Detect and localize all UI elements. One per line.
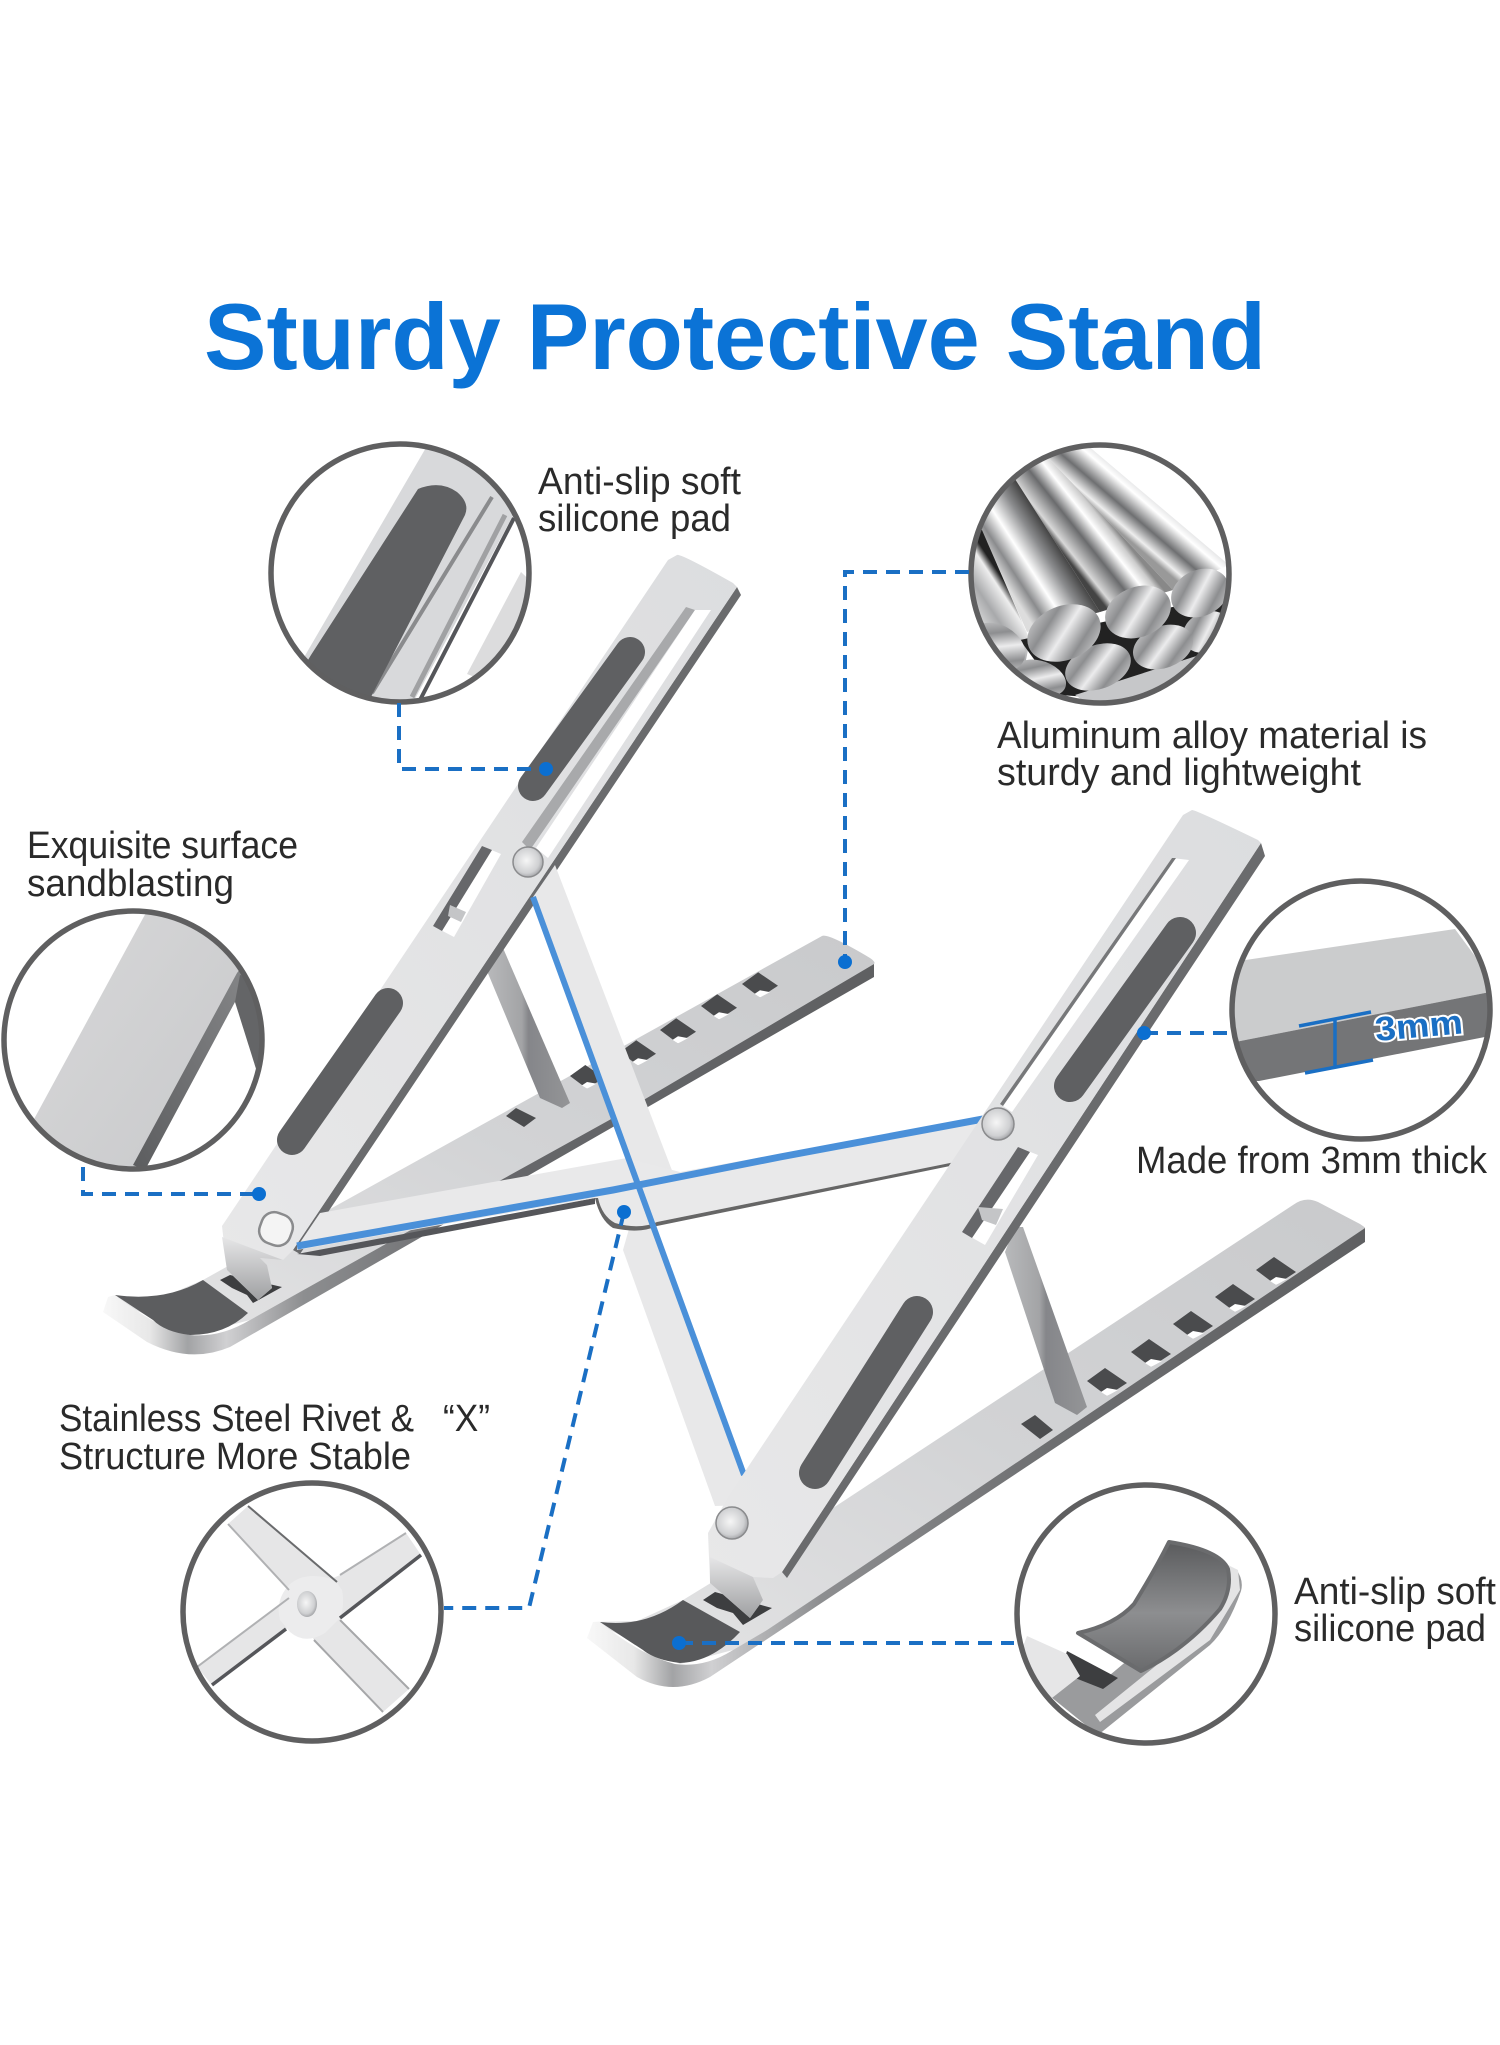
blue highlight lines [297,897,983,1475]
diagonal brace limb [533,865,750,1506]
right stand base [587,1200,1365,1687]
circle: foot pad detail [1024,1540,1242,1732]
right stand arm [708,810,1265,1618]
lower silicone pad [292,1003,388,1140]
circle: 3mm thickness detail [1234,929,1488,1081]
label: anti-slip soft silicone pad (top): silicone pad [538,498,731,540]
label: anti-slip soft silicone pad (bottom) [1294,1571,1496,1650]
circle: anti-slip pad detail [305,449,526,700]
callout dots [252,762,1151,1650]
right stand rear leg [1005,1227,1087,1415]
callout leaders [83,572,1231,1643]
label: anti-slip soft silicone pad (top): Anti-slip soft [538,461,741,503]
circle: aluminum rods detail [974,448,1226,700]
X brace [297,865,983,1506]
label: stainless steel rivet [59,1398,490,1478]
label: exquisite surface sandblasting [27,825,298,905]
label: aluminum alloy: sturdy and lightweight [997,752,1361,794]
label: anti-slip soft silicone pad (bottom): Anti-slip soft [1294,1571,1496,1613]
label: stainless steel rivet: Stainless Steel Rivet & [59,1398,414,1440]
lower silicone pad [815,1312,917,1473]
horizontal brace limb [297,1117,983,1256]
left stand rear leg [487,948,570,1108]
label: anti-slip soft silicone pad (top) [538,461,741,540]
circle outlines [4,444,1490,1743]
title: Sturdy Protective Stand [204,284,1266,389]
label: made from 3mm thick: Made from 3mm thick [1136,1140,1488,1182]
label: stainless steel rivet: “X” [443,1398,490,1440]
label: stainless steel rivet: Structure More Stable [59,1436,411,1478]
circle: X rivet detail [198,1505,422,1713]
rivets [255,847,1014,1539]
left stand base [103,936,874,1354]
3mm label: 3mm [1373,1003,1464,1049]
circle: sandblasted surface detail [34,914,260,1166]
left stand [103,555,874,1354]
label: aluminum alloy: Aluminum alloy material is [997,715,1427,757]
upper silicone pad [533,652,630,786]
upper silicone pad [1070,933,1180,1086]
label: anti-slip soft silicone pad (bottom): silicone pad [1294,1608,1486,1650]
label: exquisite surface sandblasting: Exquisite surface [27,825,298,867]
label: aluminum alloy [997,715,1427,794]
thickness marker [1299,1012,1373,1073]
label: exquisite surface sandblasting: sandblasting [27,863,234,905]
left stand arm [222,555,741,1300]
